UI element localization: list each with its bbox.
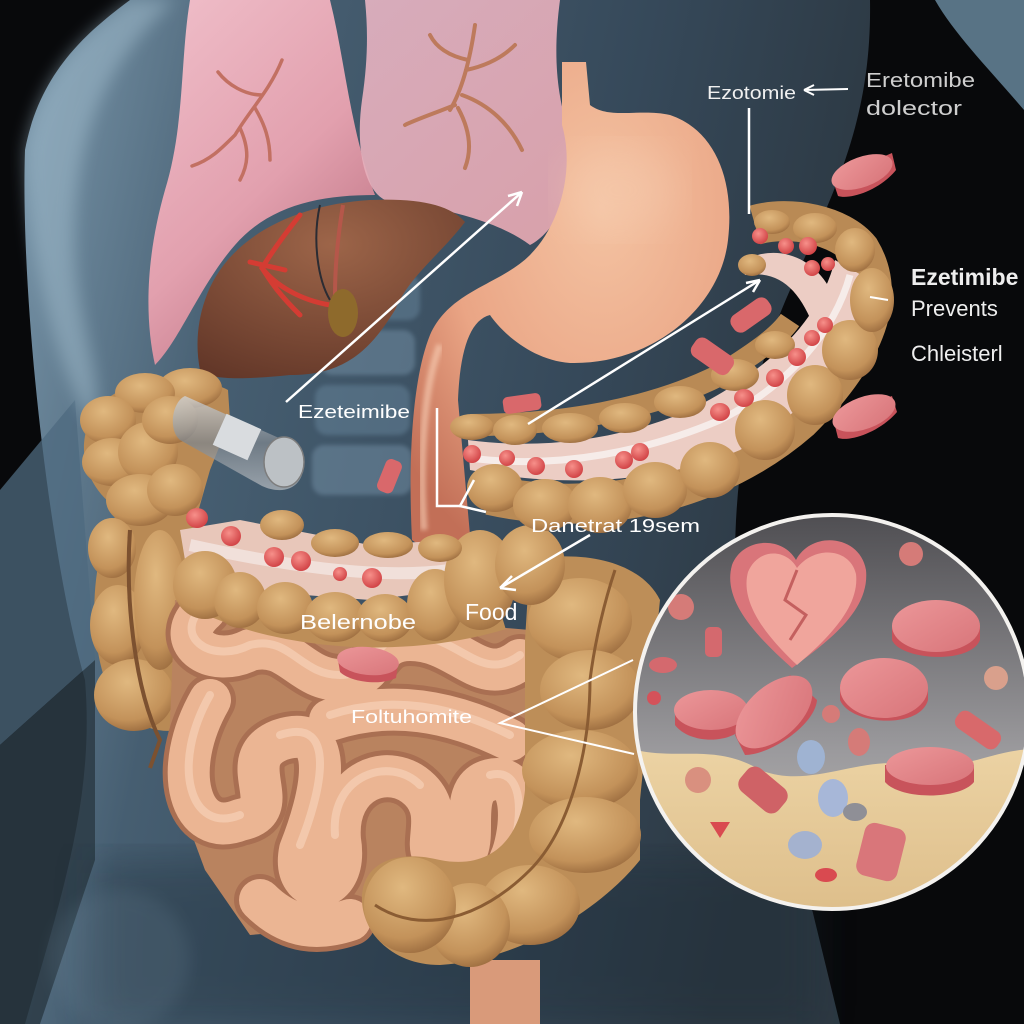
left lung and liver lobe bbox=[148, 0, 375, 365]
label: Ezetimibe prevents cholesterol: Ezetimibe bbox=[911, 264, 1018, 290]
right lung bbox=[360, 0, 574, 245]
label: Belernobe: Belernobe bbox=[300, 612, 416, 634]
label: Ezetimibe prevents cholesterol: Chleisterl bbox=[911, 341, 1003, 366]
floating tablets bbox=[336, 147, 900, 682]
upper intestinal tube with villi and particles bbox=[450, 210, 894, 533]
liver with gallbladder and vessels bbox=[198, 200, 465, 378]
label: Ezotomie: Ezotomie bbox=[707, 83, 796, 103]
label: Eretomibe dolector: Eretomibe bbox=[866, 70, 975, 92]
inset sand floor bbox=[641, 750, 1024, 907]
inset: magnified tablets in the gut bbox=[620, 514, 1024, 930]
stomach and oesophagus bbox=[411, 62, 729, 547]
ascending colon bbox=[80, 368, 230, 768]
label: Eretomibe dolector: dolector bbox=[866, 98, 962, 120]
label: Ezetimibe prevents cholesterol: Prevents bbox=[911, 296, 998, 321]
label: Ezeteimibe: Ezeteimibe bbox=[298, 402, 410, 422]
lower intestinal tube with villi and particles bbox=[173, 508, 565, 642]
label: Foltuhomite: Foltuhomite bbox=[351, 707, 472, 727]
descending colon and rectum bbox=[362, 556, 660, 1024]
label: Danetrat 19sem: Danetrat 19sem bbox=[531, 516, 700, 536]
inset large tablets bbox=[674, 600, 980, 883]
inset broken heart bbox=[730, 540, 866, 668]
inset small particles bbox=[647, 542, 1008, 882]
vial capsule bbox=[173, 396, 304, 490]
pointer lines and arrows bbox=[286, 85, 888, 754]
small intestine bbox=[168, 600, 530, 935]
label: Food: Food bbox=[465, 599, 517, 625]
spine behind organs bbox=[312, 225, 420, 495]
